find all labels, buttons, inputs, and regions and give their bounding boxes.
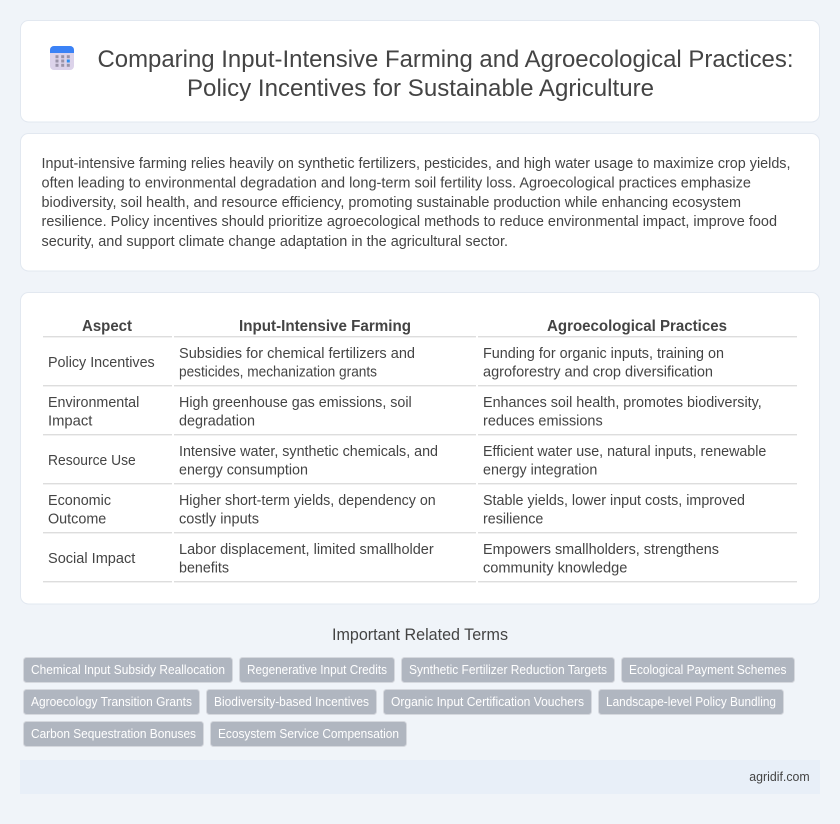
table row: policy incentives: Policy Incentives: [48, 355, 155, 371]
table row: economic outcome: costly inputs: [179, 512, 259, 528]
text block: introduction paragraph: resilience. Policy incentives should prioritize agroecological methods to reduce environmental impact, improve food: [42, 214, 777, 230]
text block: introduction paragraph: [42, 156, 790, 250]
tag: organic input certification vouchers: Organic Input Certification Vouchers: [391, 695, 584, 709]
icon: calendar: [50, 46, 74, 70]
tag: ecological payment schemes: [622, 658, 794, 682]
footer bar: [20, 760, 820, 794]
table row: resource use: Efficient water use, natural inputs, renewable: [483, 444, 766, 460]
table row: economic outcome: Outcome: [48, 512, 106, 528]
tag: regenerative input credits: [240, 658, 394, 682]
tag: regenerative input credits: Regenerative Input Credits: [247, 663, 387, 677]
table header: Agroecological Practices: [547, 318, 727, 335]
tag: synthetic fertilizer reduction targets: Synthetic Fertilizer Reduction Targets: [409, 663, 607, 677]
title: Comparing Input-Intensive Farming and Agroecological Practices:: [98, 46, 794, 73]
table row: policy incentives: Funding for organic inputs, training on: [483, 346, 724, 362]
text block: introduction paragraph: Input-intensive farming relies heavily on synthetic fertilizers, pesticides, and high water usage to maximize crop yields,: [42, 156, 790, 172]
table row: resource use: energy integration: [483, 462, 597, 478]
table row: social impact: community knowledge: [483, 560, 627, 576]
table row: resource use: [48, 444, 766, 478]
table row: policy incentives: pesticides, mechanization grants: [179, 364, 377, 380]
text block: introduction paragraph: biodiversity, soil health, and resource efficiency, promoting sustainable production while enhancing ecosystem: [42, 195, 741, 211]
panel: title header: [20, 20, 820, 122]
table row: policy incentives: agroforestry and crop diversification: [483, 364, 713, 380]
table header: Input-Intensive Farming: [239, 318, 411, 335]
table row: environmental impact: Environmental: [48, 395, 139, 411]
table row: economic outcome: Higher short-term yields, dependency on: [179, 493, 436, 509]
title: [98, 46, 794, 102]
table row: social impact: Social Impact: [48, 551, 135, 567]
table row: resource use: energy consumption: [179, 462, 308, 478]
table row: resource use: Intensive water, synthetic chemicals, and: [179, 444, 438, 460]
table row: economic outcome: resilience: [483, 512, 543, 528]
table row: economic outcome: [48, 493, 745, 528]
table row: environmental impact: [48, 395, 762, 430]
tag: synthetic fertilizer reduction targets: [402, 658, 614, 682]
panel: comparison table: [20, 292, 820, 604]
table row: environmental impact: reduces emissions: [483, 414, 603, 430]
tag: agroecology transition grants: Agroecology Transition Grants: [31, 695, 192, 709]
tag: chemical input subsidy reallocation: Chemical Input Subsidy Reallocation: [31, 663, 225, 677]
tag: biodiversity-based incentives: [206, 690, 376, 714]
table row: policy incentives: [48, 346, 724, 380]
tag: carbon sequestration bonuses: [24, 722, 204, 746]
tag: agroecology transition grants: [24, 690, 200, 714]
table row: social impact: Labor displacement, limited smallholder: [179, 542, 434, 558]
heading: important related terms: Important Related Terms: [332, 626, 508, 644]
tag: ecological payment schemes: Ecological Payment Schemes: [629, 663, 786, 677]
table row: social impact: Empowers smallholders, strengthens: [483, 542, 719, 558]
table header: [82, 318, 727, 335]
tag: chemical input subsidy reallocation: [24, 658, 232, 682]
table row: environmental impact: High greenhouse gas emissions, soil: [179, 395, 412, 411]
table row: social impact: [48, 542, 719, 576]
tag: organic input certification vouchers: [384, 690, 592, 714]
text block: introduction paragraph: security, and support climate change adaptation in the agricultural sector.: [42, 234, 508, 250]
tag: carbon sequestration bonuses: Carbon Sequestration Bonuses: [31, 727, 196, 741]
table header: Aspect: [82, 318, 133, 335]
table rules: [43, 336, 797, 582]
table row: resource use: Resource Use: [48, 453, 136, 469]
table row: environmental impact: Enhances soil health, promotes biodiversity,: [483, 395, 762, 411]
tag: ecosystem service compensation: Ecosystem Service Compensation: [218, 727, 399, 741]
tag: landscape-level policy bundling: [598, 690, 784, 714]
panel: introduction: [20, 134, 820, 271]
table row: environmental impact: Impact: [48, 414, 92, 430]
text block: introduction paragraph: often leading to environmental degradation and long-term soil fertility loss. Agroecological practices emphasize: [42, 176, 751, 192]
tag list: related terms: [24, 658, 794, 746]
table row: social impact: benefits: [179, 560, 229, 576]
title: Policy Incentives for Sustainable Agriculture: [187, 75, 654, 102]
table row: policy incentives: Subsidies for chemical fertilizers and: [179, 346, 415, 362]
footer source text: agridif.com: [749, 769, 810, 784]
table row: economic outcome: Economic: [48, 493, 111, 509]
tag: ecosystem service compensation: [210, 722, 406, 746]
table row: environmental impact: degradation: [179, 414, 255, 430]
tag: landscape-level policy bundling: Landscape-level Policy Bundling: [606, 695, 776, 709]
tag: biodiversity-based incentives: Biodiversity-based Incentives: [214, 695, 369, 709]
table row: economic outcome: Stable yields, lower input costs, improved: [483, 493, 745, 509]
